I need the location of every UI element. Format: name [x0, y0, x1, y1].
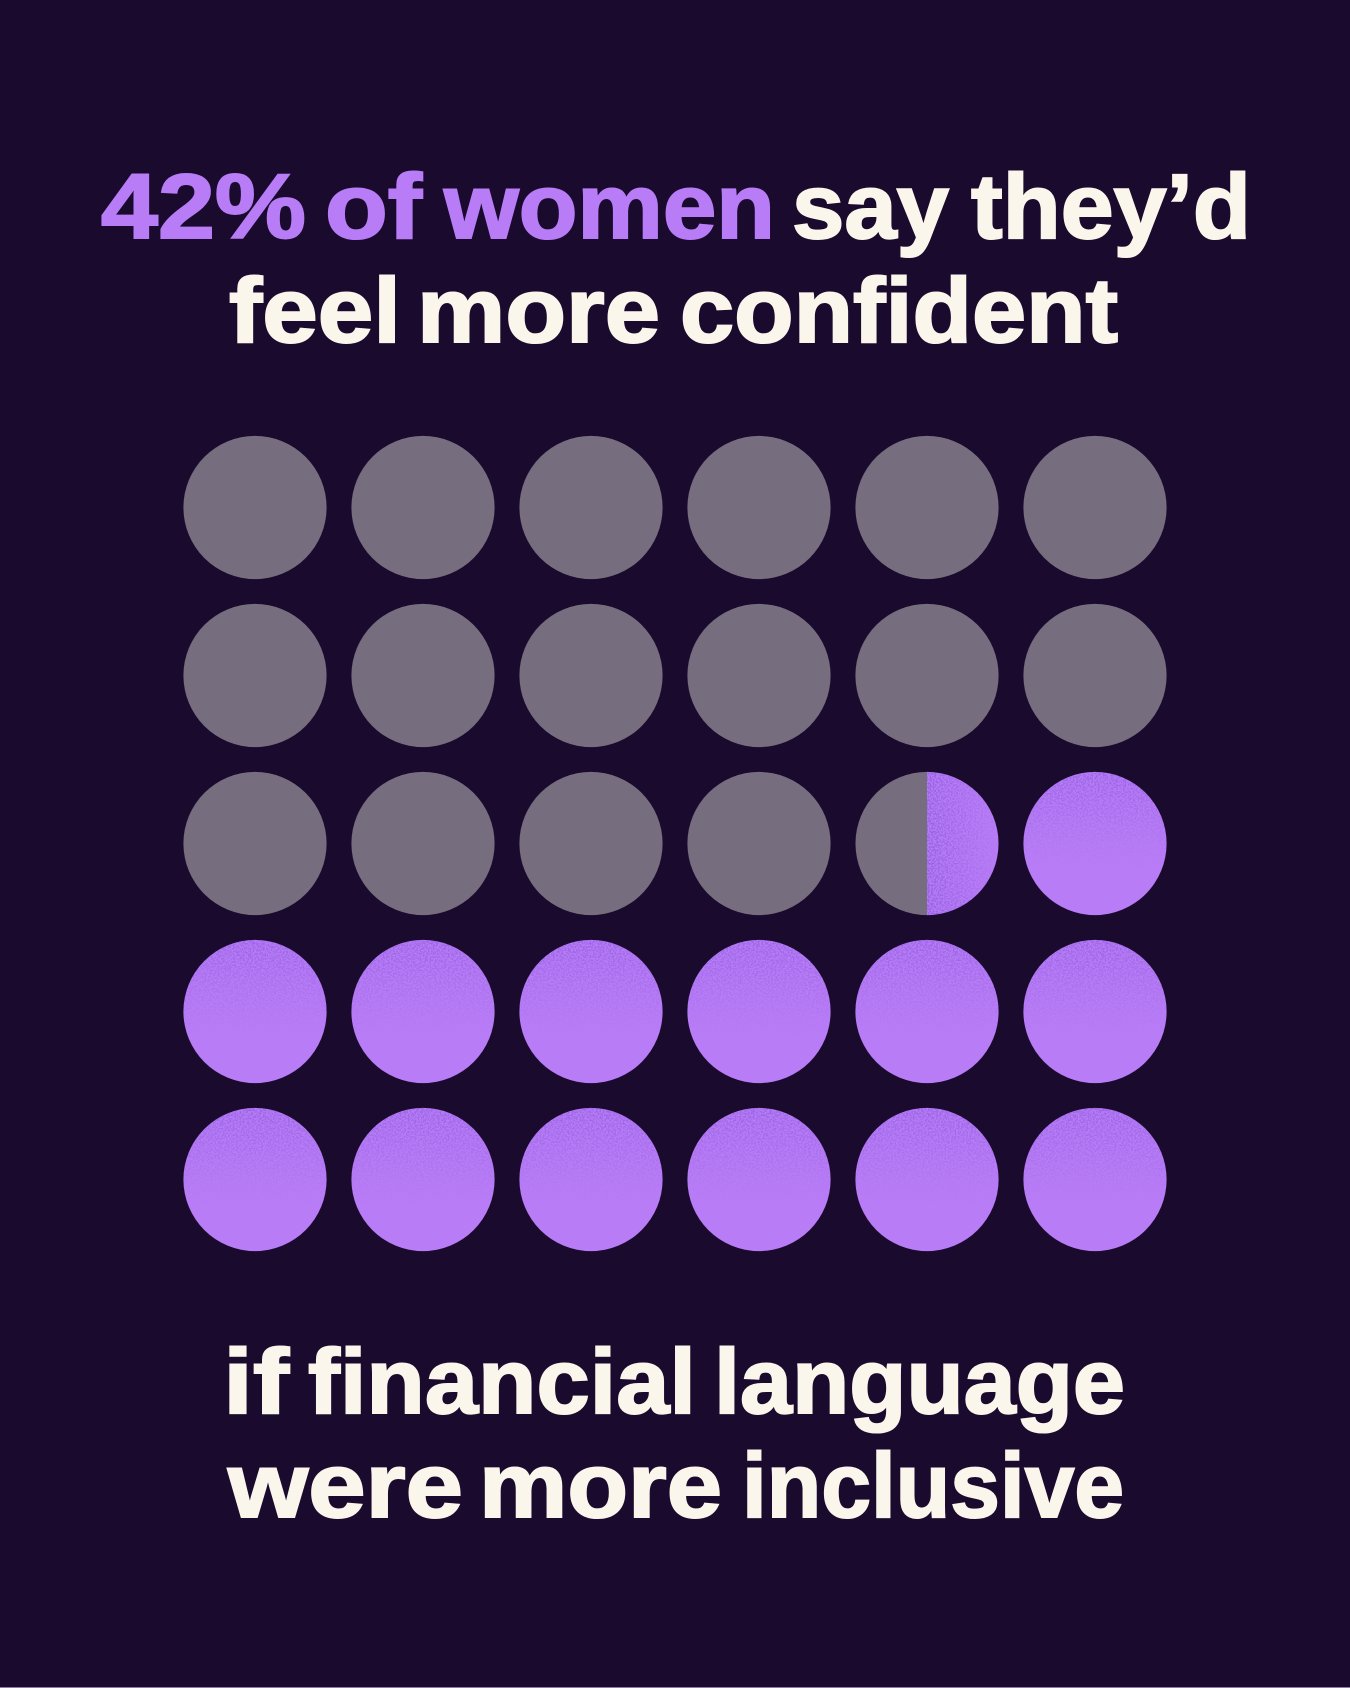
highlighted statistic: 42% of women	[101, 156, 775, 258]
closing text: if financial language were more inclusive: language	[714, 1331, 1125, 1433]
closing text: if financial language were more inclusive: more	[479, 1435, 722, 1537]
closing text: if financial language were more inclusive: inclusive	[742, 1435, 1124, 1537]
closing text: if financial language were more inclusive	[223, 1331, 1125, 1537]
heading line two: feel more confident	[229, 260, 1118, 362]
heading: 42% of women say they'd feel more confident	[101, 156, 1251, 362]
heading remainder: say they'd	[792, 156, 1251, 258]
heading line two: feel more confident: more	[417, 260, 660, 362]
heading remainder: say they'd: they’d	[971, 156, 1251, 258]
dot chart: 30 circles, 42 percent purple	[183, 436, 1167, 1251]
closing text: if financial language were more inclusive: were	[227, 1435, 463, 1537]
gray circles: remaining share	[183, 436, 1167, 915]
highlighted statistic: 42% of women: 42%	[101, 156, 306, 258]
closing text: if financial language were more inclusive: financial	[308, 1331, 696, 1433]
half circle: split gray and purple	[855, 772, 999, 915]
heading line two: feel more confident: feel	[229, 260, 401, 362]
highlighted statistic: 42% of women: of	[325, 156, 422, 258]
heading remainder: say they'd: say	[792, 156, 949, 258]
closing text: if financial language were more inclusive: if	[223, 1331, 289, 1433]
purple circles: 42 percent share	[183, 772, 1167, 1251]
highlighted statistic: 42% of women: women	[443, 156, 775, 258]
heading line two: feel more confident: confident	[680, 260, 1118, 362]
